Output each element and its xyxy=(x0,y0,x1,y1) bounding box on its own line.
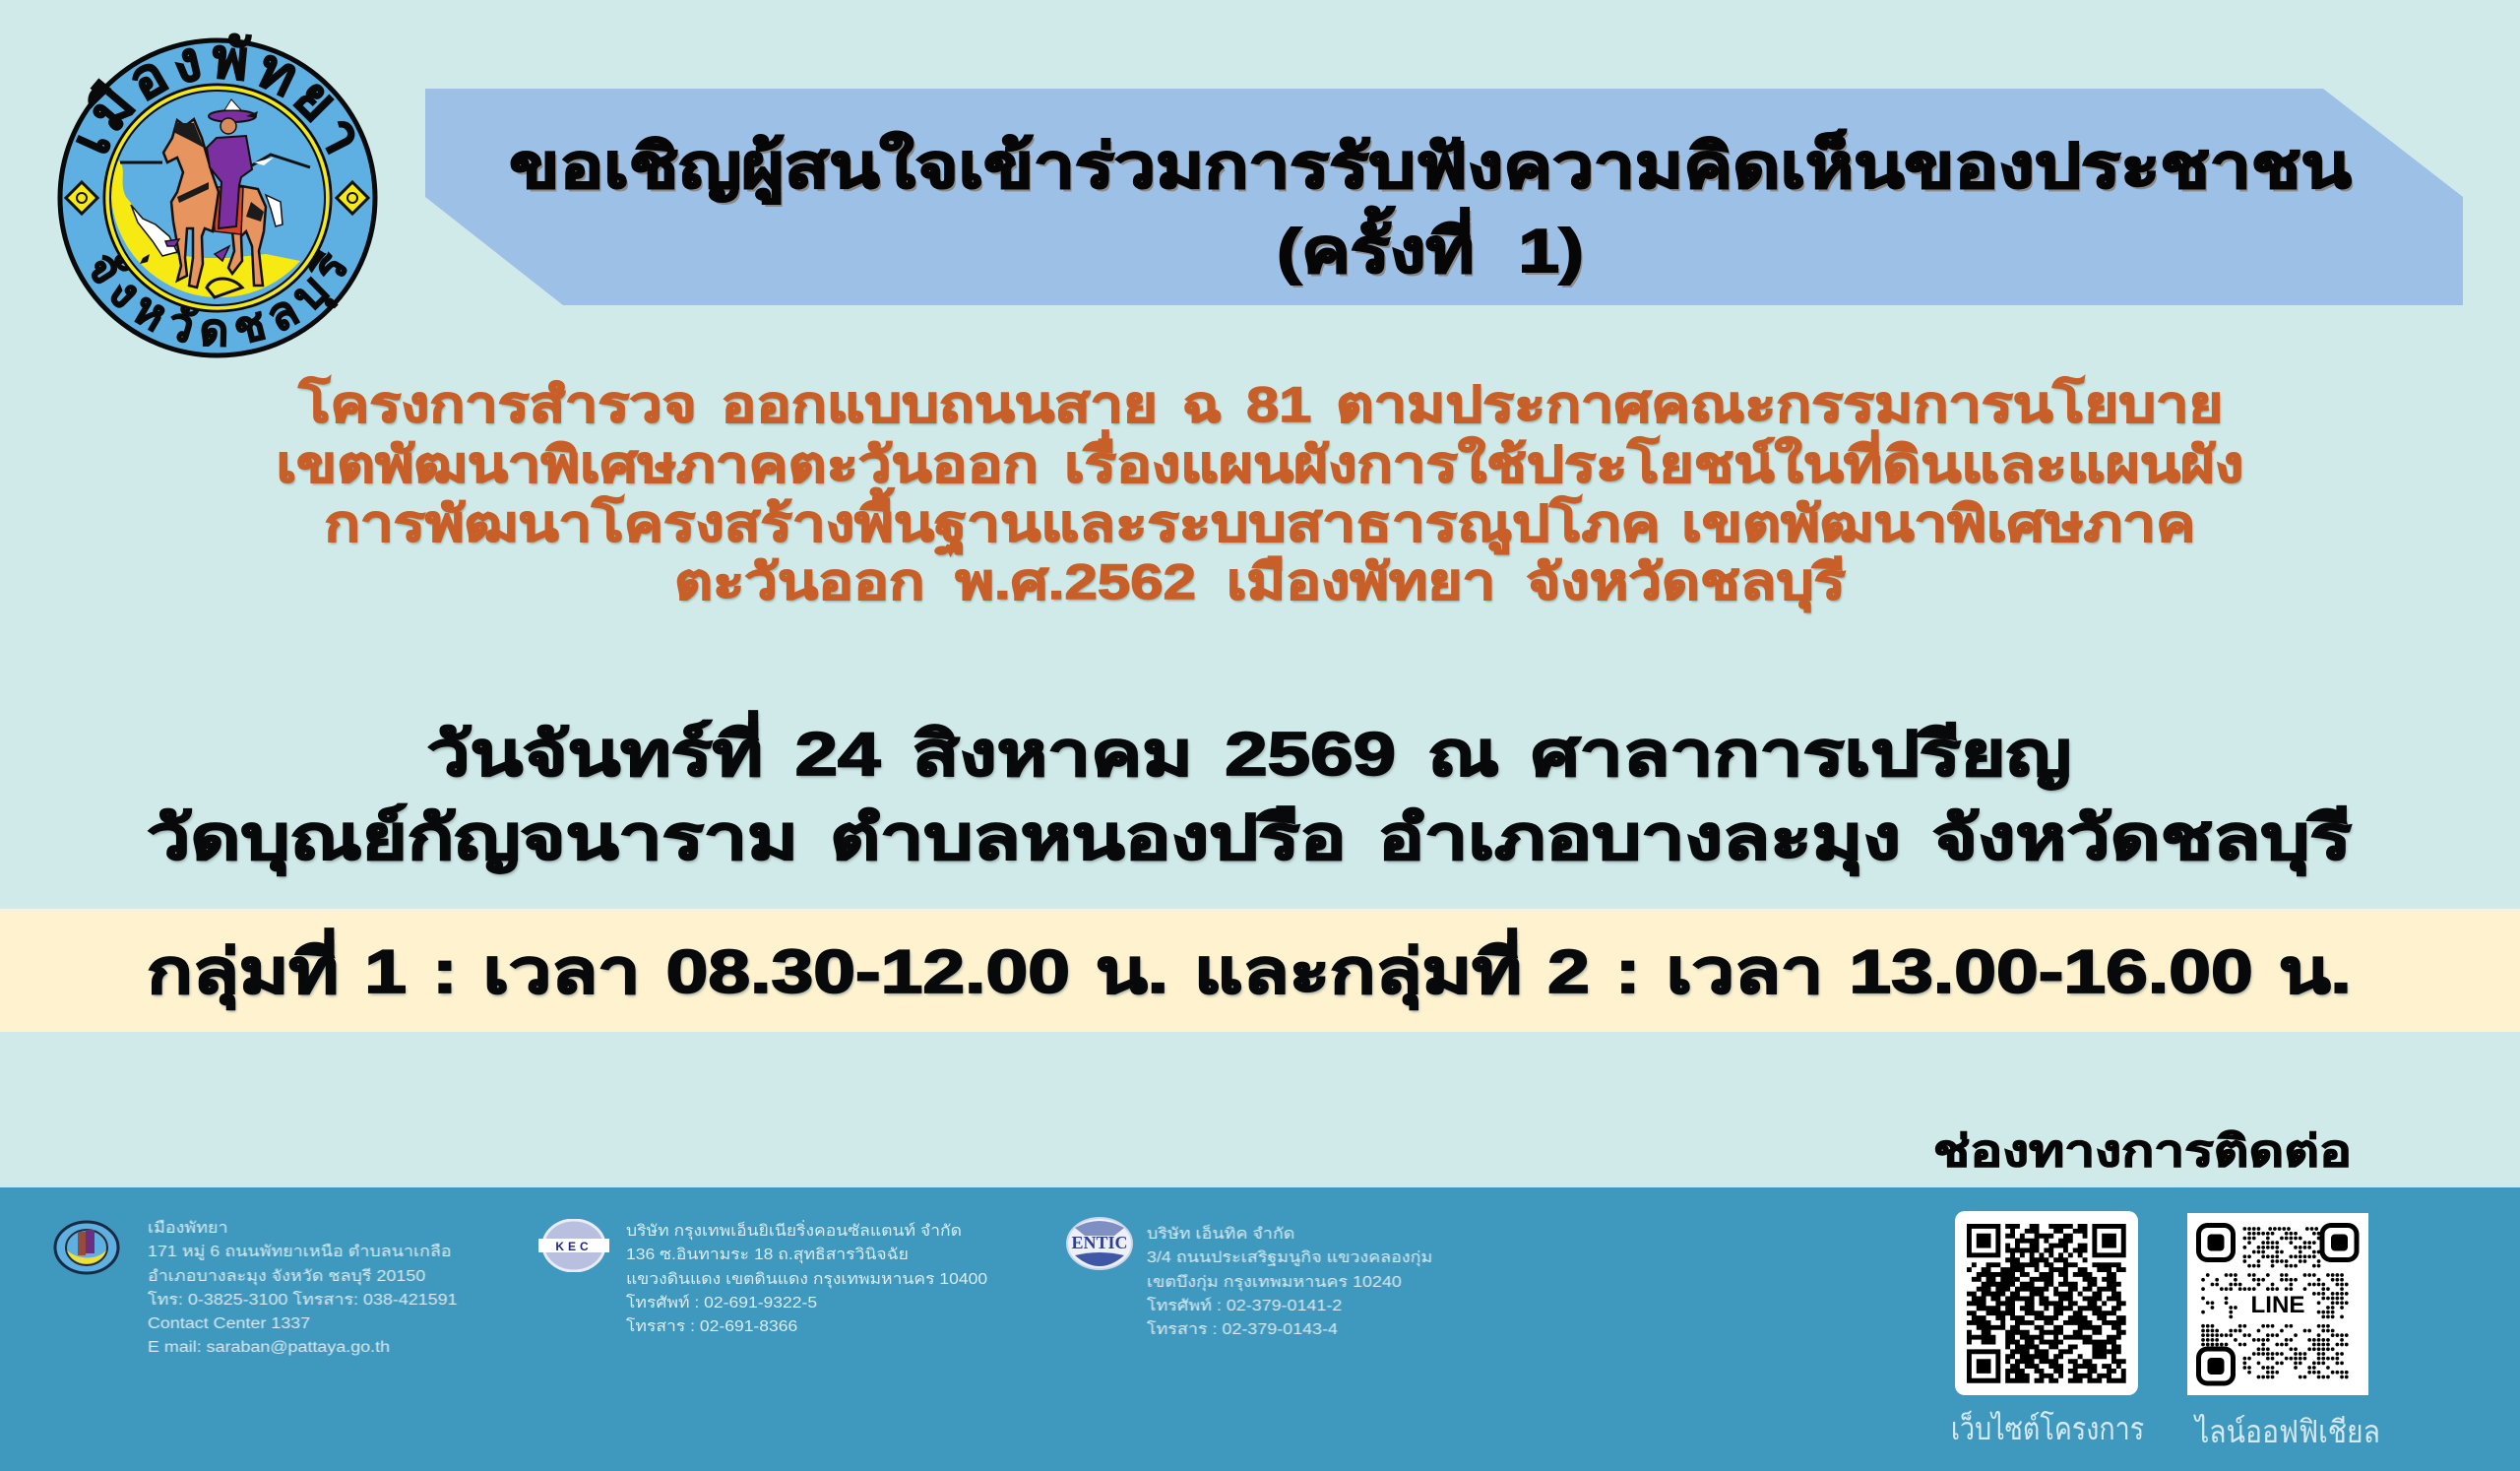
text: Pattaya city contact: โทร: 0-3825-3100 โทรสาร: 038-421591 xyxy=(148,1292,458,1309)
text: ENTIC contact: โทรสาร : 02-379-0143-4 xyxy=(1147,1321,1338,1338)
red saddle cloth xyxy=(213,187,243,234)
icon: ENTIC logo xyxy=(1066,1217,1133,1270)
emblem: Pattaya city seal xyxy=(57,33,378,358)
project description, orange text: โครงการสำรวจ ออกแบบถนนสาย ฉ 81 ตามประกาศคณะกรรมการนโยบาย xyxy=(299,377,2223,432)
icon: small Pattaya seal xyxy=(53,1221,120,1274)
emblem: Pattaya city seal: จังหวัดชลบุรี xyxy=(91,250,346,347)
project description, orange text xyxy=(277,374,2243,615)
QR code: LINE official xyxy=(2187,1213,2368,1395)
horse front xyxy=(163,119,219,288)
icon: KEC logo xyxy=(538,1219,609,1272)
caption: project website: เว็บไซต์โครงการ xyxy=(1951,1411,2144,1446)
caption: LINE official: ไลน์ออฟฟิเชียล xyxy=(2195,1414,2380,1449)
text: Pattaya city contact: อำเภอบางละมุง จังหวัด ชลบุรี 20150 xyxy=(148,1268,425,1285)
text: ENTIC contact xyxy=(1146,1225,1432,1338)
icon: KEC logo: KEC xyxy=(555,1240,593,1253)
text: ENTIC contact: บริษัท เอ็นทิค จำกัด xyxy=(1147,1226,1294,1243)
text: KEC contact: แขวงดินแดง เขตดินแดง กรุงเทพมหานคร 10400 xyxy=(626,1271,987,1288)
text: KEC contact xyxy=(626,1220,987,1335)
text: KEC contact: โทรสาร : 02-691-8366 xyxy=(626,1318,797,1335)
text: ENTIC contact: เขตบึงกุ่ม กรุงเทพมหานคร 10240 xyxy=(1147,1274,1402,1291)
rock xyxy=(207,279,242,297)
time schedule text: กลุ่มที่ 1 : เวลา 08.30-12.00 น. และกลุ่มที่ 2 : เวลา 13.00-16.00 น. xyxy=(147,938,2352,1006)
text: Pattaya city contact: Contact Center 1337 xyxy=(148,1315,310,1332)
text: KEC contact: โทรศัพท์ : 02-691-9322-5 xyxy=(626,1295,817,1311)
footer background band xyxy=(0,1187,2520,1471)
date and venue xyxy=(147,710,2353,880)
project description, orange text: ตะวันออก พ.ศ.2562 เมืองพัทยา จังหวัดชลบุรี xyxy=(674,554,1846,609)
title heading: ขอเชิญผู้สนใจเข้าร่วมการรับฟังความคิดเห็นของประชาชน xyxy=(509,133,2352,201)
icon: ENTIC logo: ENTIC xyxy=(1071,1233,1128,1252)
yellow time band xyxy=(0,909,2520,1032)
date and venue: วันจันทร์ที่ 24 สิงหาคม 2569 ณ ศาลาการเปรียญ xyxy=(427,721,2071,789)
QR code: project website xyxy=(1955,1211,2138,1395)
text: ENTIC contact: โทรศัพท์ : 02-379-0141-2 xyxy=(1147,1298,1342,1314)
text: Pattaya city contact: 171 หมู่ 6 ถนนพัทยาเหนือ ตำบลนาเกลือ xyxy=(148,1244,452,1260)
title heading second line: (ครั้งที่ 1) xyxy=(1277,218,1584,286)
text: Pattaya city contact: E mail: saraban@pattaya.go.th xyxy=(148,1339,390,1356)
text: ENTIC contact: 3/4 ถนนประเสริฐมนูกิจ แขวงคลองกุ่ม xyxy=(1147,1249,1432,1266)
text: Pattaya city contact xyxy=(148,1219,458,1356)
project description, orange text: การพัฒนาโครงสร้างพื้นฐานและระบบสาธารณูปโภค เขตพัฒนาพิเศษภาค xyxy=(324,496,2196,551)
horse hind xyxy=(228,185,266,286)
title banner shape xyxy=(425,89,2463,305)
rider xyxy=(207,136,252,228)
date and venue: วัดบุณย์กัญจนาราม ตำบลหนองปรือ อำเภอบางละมุง จังหวัดชลบุรี xyxy=(147,804,2352,872)
project description, orange text: เขตพัฒนาพิเศษภาคตะวันออก เรื่องแผนผังการใช้ประโยชน์ในที่ดินและแผนผัง xyxy=(277,437,2243,492)
text: KEC contact: บริษัท กรุงเทพเอ็นยิเนียริ่งคอนซัลแตนท์ จำกัด xyxy=(626,1223,962,1240)
contact heading: ช่องทางการติดต่อ xyxy=(1933,1127,2352,1176)
text: Pattaya city contact: เมืองพัทยา xyxy=(148,1220,228,1237)
QR code: LINE official: LINE xyxy=(2250,1292,2305,1318)
text: KEC contact: 136 ซ.อินทามระ 18 ถ.สุทธิสารวินิจฉัย xyxy=(626,1247,909,1263)
